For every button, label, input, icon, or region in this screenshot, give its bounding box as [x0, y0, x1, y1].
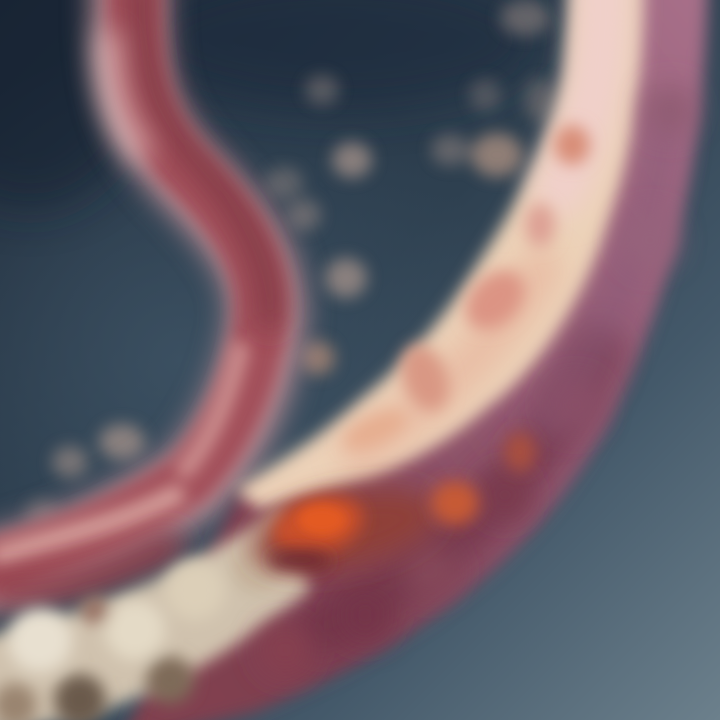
cream lining [235, 0, 642, 510]
tube highlights [108, 40, 140, 150]
thin intestine tube [0, 0, 270, 590]
folds and bumps [259, 86, 694, 676]
pale lower-left mass [0, 505, 310, 720]
peach lining shade [360, 270, 540, 450]
pale lumps [0, 546, 279, 720]
pale pink top of lining [560, 0, 603, 190]
wall dark folds [320, 350, 600, 630]
orange inflamed spots [245, 432, 536, 585]
tube body [0, 0, 262, 572]
pink inner patches [338, 125, 590, 457]
tube outer halo [0, 0, 266, 578]
floating particles [25, 0, 556, 529]
tube dark core [142, 0, 270, 320]
